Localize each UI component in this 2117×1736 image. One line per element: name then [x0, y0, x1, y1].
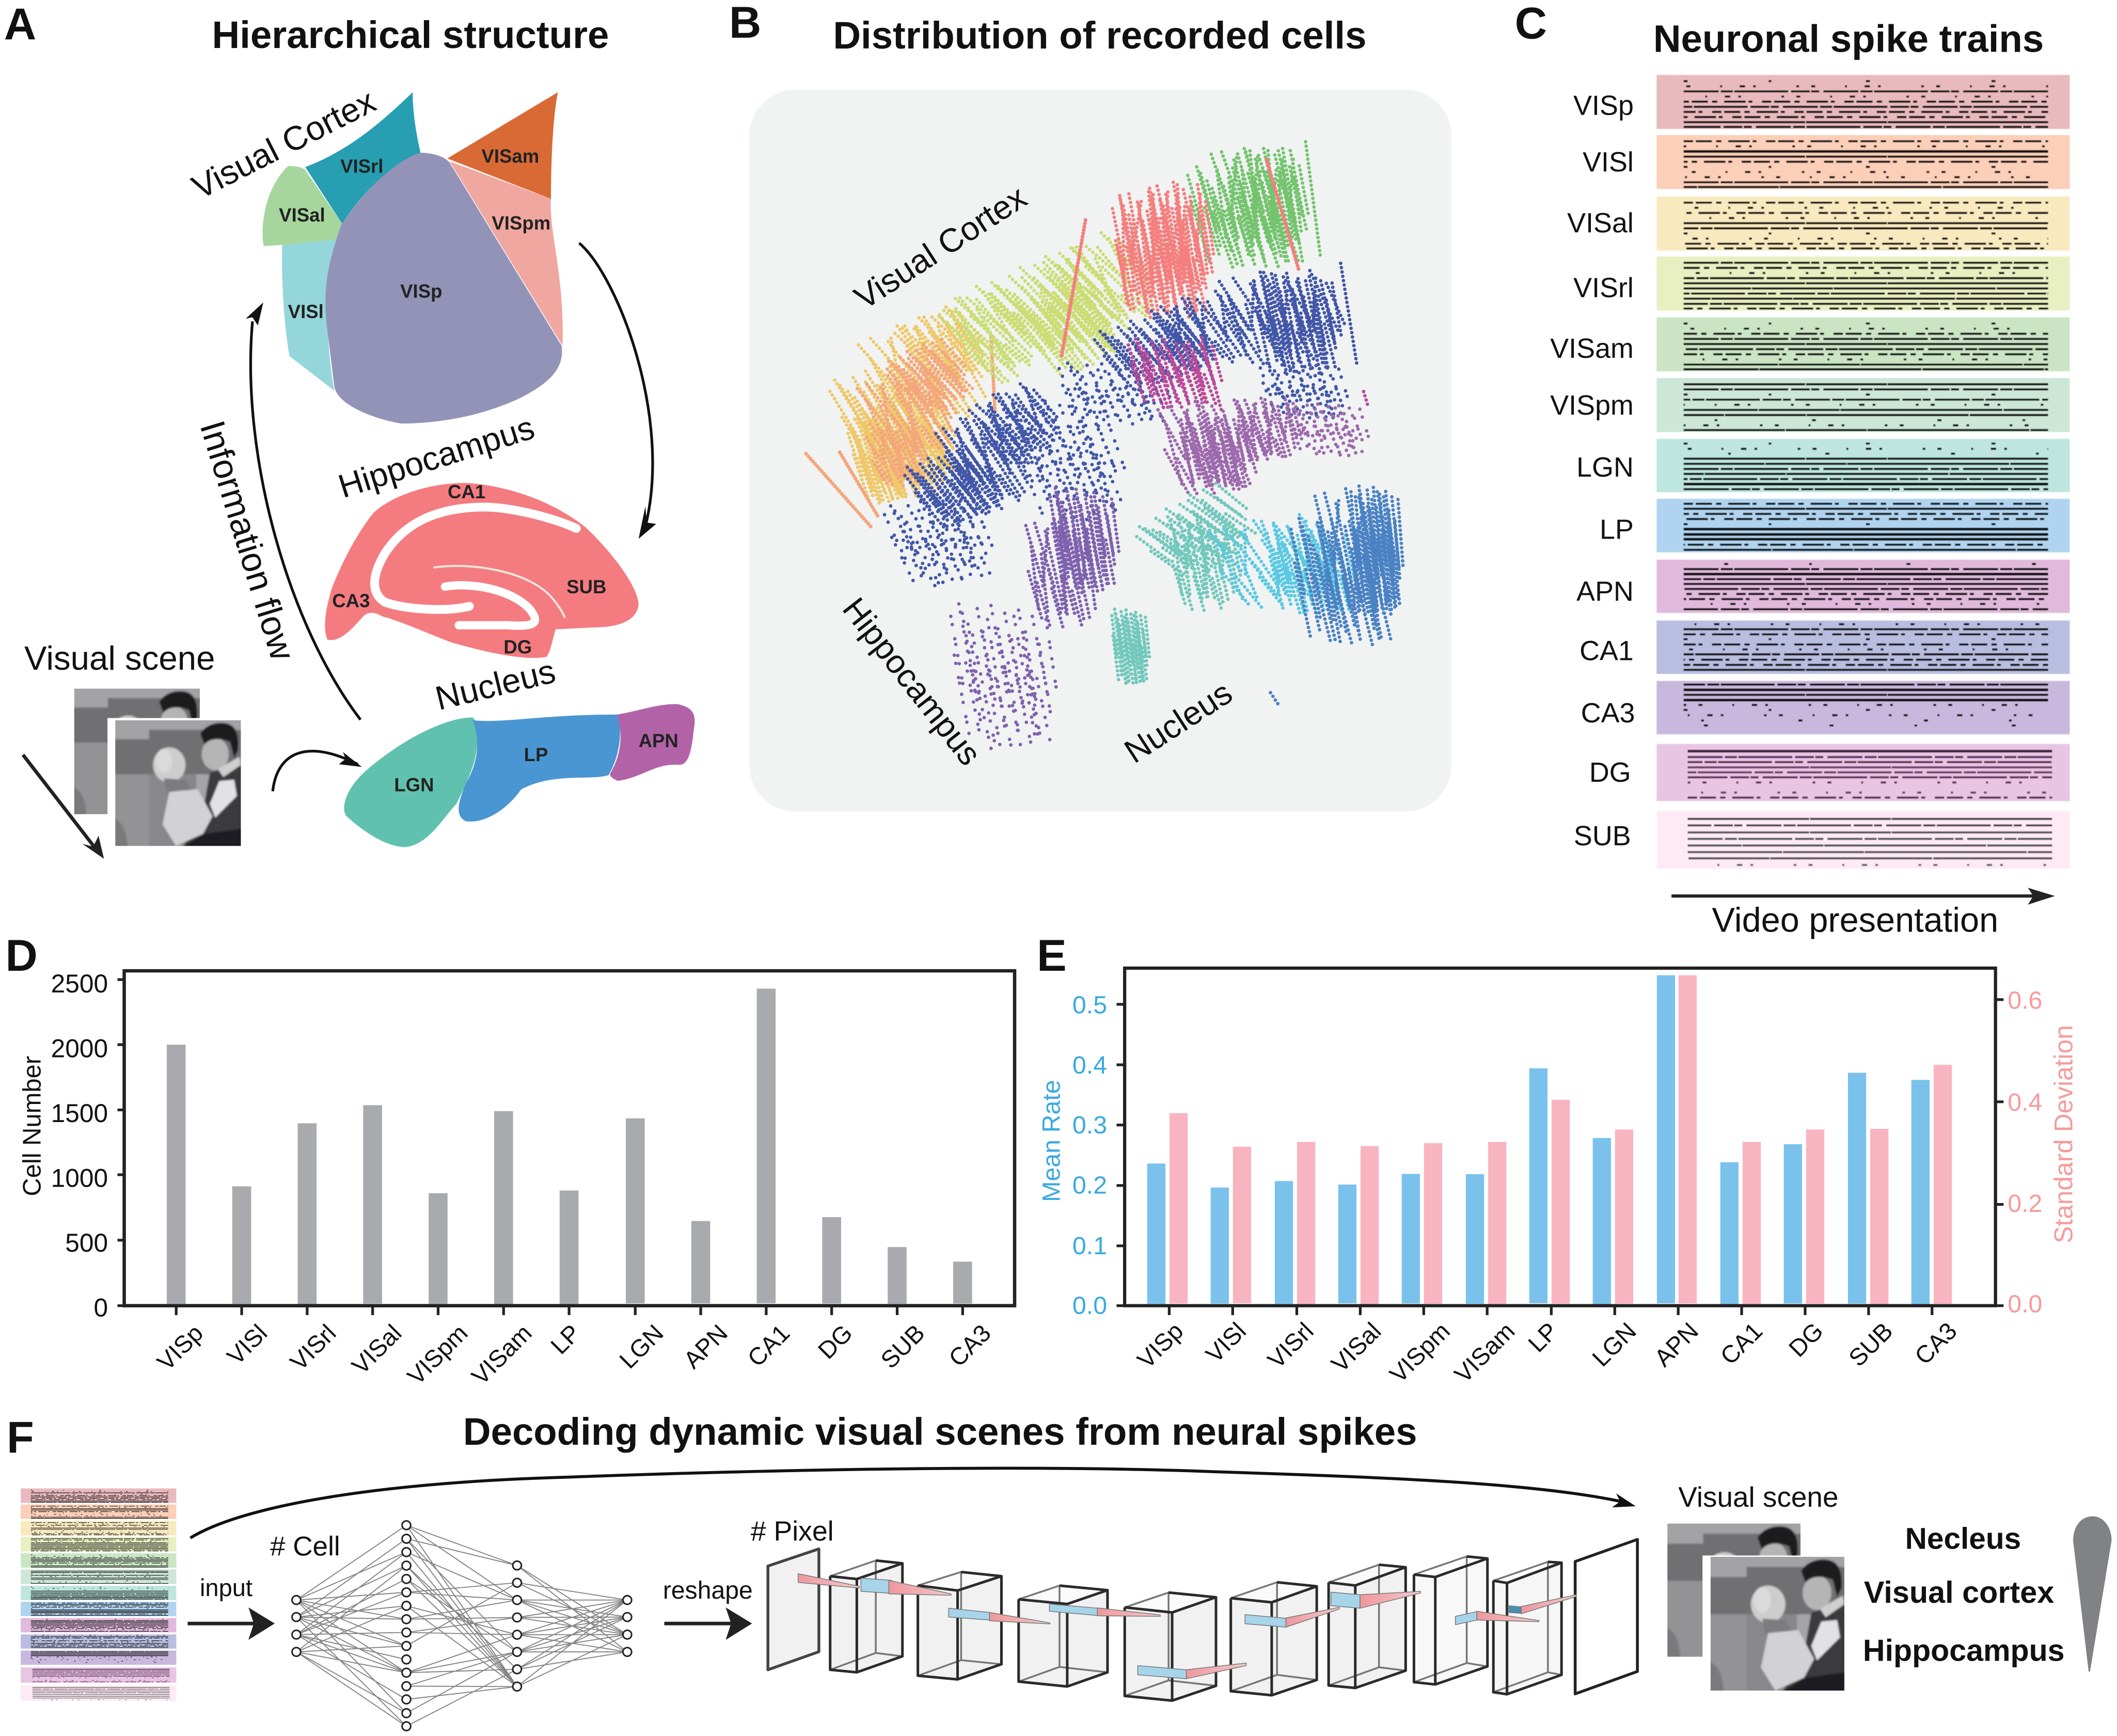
region labels on map	[279, 146, 678, 795]
label: Visual scene: Visual scene	[24, 639, 215, 677]
arrow: skip connection to output scene	[191, 1468, 1636, 1538]
cluster: violet cells	[951, 488, 1119, 750]
cluster: lime VISrl cells	[936, 219, 1171, 395]
band SUB	[1656, 811, 2069, 869]
visual scene stack	[70, 685, 245, 850]
curved label: Visual Cortex: Visual Cortex	[186, 82, 382, 206]
right y tick labels: 0.2	[2008, 1190, 2042, 1218]
band region labels: CA3	[1581, 698, 1635, 729]
band region labels: VISpm	[1550, 390, 1634, 421]
x tick labels: LGN	[614, 1319, 669, 1374]
volume 6	[1231, 1582, 1317, 1695]
band APN	[1656, 560, 2069, 613]
region labels on map: DG	[503, 637, 532, 658]
panel A: hierarchical structure	[4, 0, 694, 859]
region labels on map: VISal	[279, 204, 325, 226]
left axis title: Mean Rate	[1038, 1080, 1066, 1202]
volume 3	[918, 1572, 1001, 1679]
y tick labels: 2000	[51, 1034, 108, 1063]
x tick labels: VISrl	[285, 1319, 341, 1376]
label: Visual scene: Visual scene	[1678, 1481, 1839, 1513]
right y tick labels: 0.4	[2008, 1088, 2042, 1116]
label: reshape: reshape	[663, 1576, 753, 1604]
curved label: Hippocampus: Hippocampus	[334, 408, 539, 505]
heading: Distribution of recorded cells: Distribution of recorded cells	[833, 14, 1366, 57]
ranking label: Visual cortex: Visual cortex	[1864, 1575, 2054, 1609]
arrow: reshape	[664, 1607, 752, 1640]
area VISrl	[305, 92, 420, 224]
region labels on map: CA1	[448, 481, 485, 502]
x tick labels: VISl	[222, 1319, 272, 1370]
cluster: magenta cells	[1128, 338, 1368, 412]
band region labels: SUB	[1574, 820, 1631, 851]
volume 7	[1329, 1565, 1405, 1688]
fully connected network	[292, 1521, 631, 1731]
x tick labels: LGN	[1587, 1317, 1641, 1371]
heading: Neuronal spike trains: Neuronal spike trains	[1653, 18, 2044, 60]
region labels on map: VISpm	[492, 213, 550, 234]
scatter of recorded cells	[806, 142, 1403, 750]
cluster: navy upper CA1 cells	[1059, 263, 1357, 427]
region labels on map: CA3	[332, 590, 370, 611]
band region labels: VISp	[1573, 90, 1634, 121]
cluster: yellow VISp cells	[827, 297, 1002, 508]
y tick labels	[51, 969, 108, 1322]
arrow: scene time direction	[23, 755, 104, 859]
cluster: teal LGN cells	[1112, 470, 1264, 685]
grey rounded backdrop	[749, 90, 1451, 812]
band VISrl	[1656, 257, 2069, 310]
band CA3	[1656, 681, 2069, 734]
panel E: mean rate and standard deviation bar chart	[1037, 931, 2078, 1388]
curved label: Nucleus: Nucleus	[432, 652, 559, 717]
y tick labels: 1000	[51, 1164, 108, 1193]
left y tick labels: 0.4	[1072, 1051, 1107, 1079]
x tick labels: VISal	[346, 1319, 407, 1379]
bars	[167, 989, 972, 1304]
ranking label: Hippocampus: Hippocampus	[1863, 1633, 2065, 1667]
label: Nucleus: Nucleus	[1118, 674, 1239, 770]
heading: Hierarchical structure: Hierarchical structure	[212, 13, 609, 56]
left y tick labels: 0.5	[1072, 991, 1107, 1019]
visual cortex areas map	[263, 92, 563, 423]
x tick labels: VISp	[1132, 1317, 1189, 1374]
right y tick labels: 0.6	[2008, 986, 2042, 1014]
label: input: input	[200, 1574, 252, 1601]
band region labels: VISrl	[1573, 272, 1634, 303]
band VISpm	[1656, 378, 2069, 432]
input plane	[768, 1549, 819, 1670]
x tick labels	[1132, 1317, 1962, 1388]
blue bars: mean rate	[1147, 975, 1930, 1304]
ranking label: Necleus: Necleus	[1905, 1522, 2021, 1555]
x tick labels: LP	[545, 1319, 586, 1360]
panel letter E: E	[1037, 931, 1067, 981]
area VISpm	[450, 161, 563, 346]
pink bars: standard deviation	[1170, 975, 1952, 1304]
y tick labels: 500	[65, 1228, 108, 1257]
label: Hippocampus: Hippocampus	[835, 591, 989, 772]
arrow: input	[187, 1607, 275, 1640]
region labels on map: VISp	[400, 281, 442, 302]
band region labels: LP	[1600, 514, 1634, 545]
label: Video presentation: Video presentation	[1712, 901, 1998, 939]
x tick labels: VISam	[466, 1319, 537, 1390]
band LP	[1656, 499, 2069, 553]
nucleus shapes	[344, 704, 694, 847]
mini spike raster input	[21, 1489, 176, 1701]
arrow: video time axis	[1671, 888, 2055, 905]
cluster: green VISam cells	[1188, 142, 1320, 269]
volume 5	[1125, 1592, 1216, 1701]
band region labels: LGN	[1576, 452, 1634, 483]
band CA1	[1656, 621, 2069, 674]
cluster: salmon VISpm cells	[1061, 160, 1299, 358]
band VISam	[1656, 318, 2069, 371]
right axis title: Standard Deviation	[2049, 1025, 2078, 1243]
region labels on map: VISl	[288, 301, 324, 322]
panel letter D: D	[5, 931, 38, 981]
panel letter C: C	[1515, 0, 1547, 49]
arrow: cortex to hippocampus	[579, 243, 656, 539]
band region labels: VISal	[1567, 208, 1634, 239]
cluster: orange VISl cells	[806, 329, 995, 527]
panel D: cell number bar chart	[5, 931, 1015, 1390]
region labels on map: APN	[639, 730, 678, 751]
area VISl	[282, 239, 339, 391]
cluster: cyan LP cells	[1209, 508, 1355, 616]
x tick labels: VISp	[152, 1319, 208, 1376]
band region labels: DG	[1589, 757, 1631, 788]
right y tick labels: 0.0	[2008, 1290, 2042, 1318]
region labels on map: VISam	[481, 146, 539, 167]
area VISp	[325, 153, 562, 423]
arrow: information flow up	[246, 303, 360, 720]
label: Visual Cortex: Visual Cortex	[848, 178, 1033, 317]
left y tick labels: 0.1	[1072, 1232, 1107, 1260]
band region labels	[1550, 90, 1635, 851]
region labels on map: LP	[524, 744, 548, 765]
band region labels: CA1	[1579, 636, 1634, 667]
icon: ranking teardrop	[2073, 1517, 2112, 1671]
network nodes	[292, 1521, 631, 1731]
cluster: blue APN cells	[1271, 486, 1403, 705]
band region labels: APN	[1576, 576, 1634, 607]
right y tick labels	[2008, 986, 2042, 1318]
hippocampus shape	[325, 483, 639, 658]
left y tick labels: 0.3	[1072, 1111, 1107, 1139]
area VISam	[447, 92, 558, 199]
region labels on map: VISrl	[340, 156, 383, 177]
band LGN	[1656, 439, 2069, 492]
band region labels: VISam	[1550, 333, 1634, 364]
cluster: navy lower cells	[883, 374, 1132, 595]
left y tick labels: 0.0	[1072, 1291, 1107, 1319]
volume 2	[830, 1560, 903, 1672]
y tick labels: 0	[94, 1293, 108, 1322]
band VISal	[1656, 196, 2069, 250]
x tick labels: VISam	[1449, 1317, 1520, 1388]
spike raster bands	[1656, 75, 2069, 869]
panel letter A: A	[4, 0, 36, 49]
region labels on map: SUB	[566, 576, 606, 597]
band region labels: VISl	[1583, 147, 1634, 178]
volume 8	[1414, 1556, 1488, 1684]
x tick labels: CA1	[1715, 1317, 1767, 1370]
x tick labels: VISrl	[1262, 1317, 1319, 1374]
y axis title: Cell Number	[18, 1056, 46, 1196]
x tick labels: CA1	[742, 1319, 795, 1372]
decoded visual scene stack	[1663, 1519, 1849, 1695]
cluster: purple upper cells	[1158, 396, 1369, 500]
x tick labels: CA3	[1909, 1317, 1962, 1370]
x tick labels: APN	[1649, 1317, 1703, 1371]
x tick labels: DG	[813, 1319, 858, 1364]
x tick labels: VISpm	[1384, 1317, 1455, 1388]
chart frame and ticks	[117, 971, 1015, 1315]
kernels: blue blocks and pink cones	[798, 1574, 1576, 1679]
band VISl	[1656, 135, 2069, 189]
arrow: scene to nucleus	[273, 751, 362, 791]
volume 9	[1493, 1562, 1561, 1694]
panel letter F: F	[7, 1413, 34, 1463]
x tick labels	[152, 1319, 996, 1390]
band DG	[1656, 744, 2069, 801]
panel F: decoding model	[7, 1410, 2112, 1731]
heading: Decoding dynamic visual scenes: Decoding dynamic visual scenes from neural spikes	[463, 1410, 1417, 1453]
x tick labels: APN	[678, 1319, 733, 1374]
network edges	[296, 1525, 627, 1726]
output plane	[1575, 1539, 1637, 1694]
x tick labels: SUB	[875, 1319, 930, 1374]
label: # Cell: # Cell	[270, 1531, 340, 1561]
panel C: neuronal spike trains	[1515, 0, 2069, 939]
x tick labels: VISal	[1326, 1317, 1386, 1378]
x tick labels: SUB	[1843, 1317, 1898, 1371]
x tick labels: VISpm	[402, 1319, 473, 1390]
band VISp	[1656, 75, 2069, 129]
area VISal	[263, 166, 342, 246]
left y tick labels	[1072, 991, 1107, 1319]
x tick labels: CA3	[943, 1319, 996, 1372]
region labels on map: LGN	[394, 774, 434, 795]
chart frame and ticks	[1116, 968, 2003, 1315]
y tick labels: 2500	[51, 969, 108, 998]
y tick labels: 1500	[51, 1099, 108, 1128]
volume 4	[1019, 1586, 1108, 1686]
convolutional decoder volumes	[768, 1539, 1637, 1701]
left y tick labels: 0.2	[1072, 1172, 1107, 1200]
label: # Pixel: # Pixel	[751, 1516, 834, 1547]
panel B: distribution of recorded cells	[729, 0, 1451, 812]
rotated label: Information flow: Information flow	[193, 416, 303, 665]
x tick labels: VISl	[1200, 1317, 1251, 1368]
x tick labels: DG	[1783, 1317, 1828, 1362]
x tick labels: LP	[1523, 1317, 1563, 1358]
